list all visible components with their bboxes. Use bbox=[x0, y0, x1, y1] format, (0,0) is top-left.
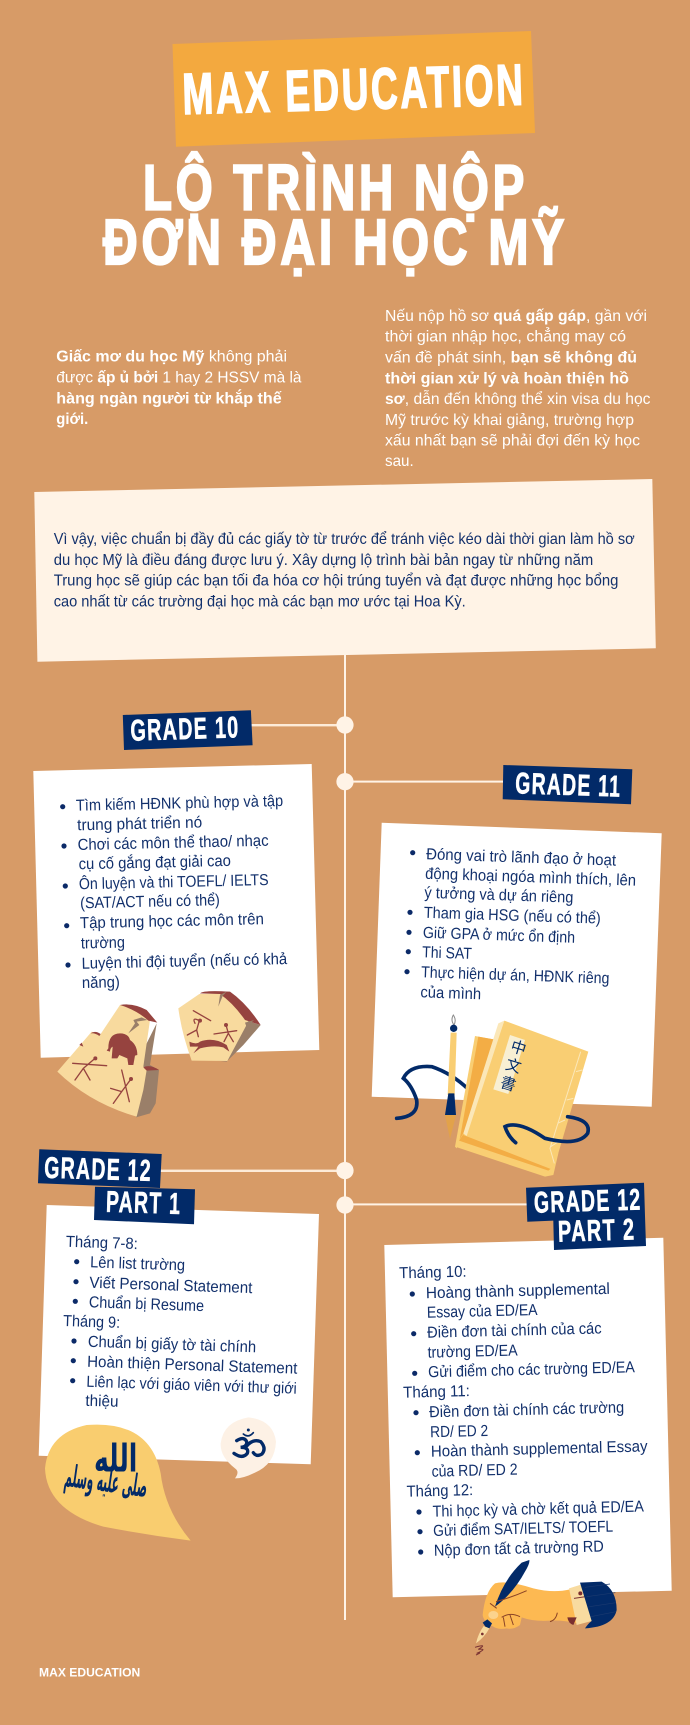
text block: intro left: hàng ngàn người từ khắp thế bbox=[56, 388, 282, 407]
list: grade 11 tasks: Giữ GPA ở mức ổn định bbox=[423, 924, 575, 947]
timeline bbox=[158, 648, 529, 1620]
list: grade 12 part 1 tasks: thiệu bbox=[85, 1393, 119, 1411]
list: grade 10 tasks: Ôn luyện và thi TOEFL/ IELTS bbox=[79, 870, 269, 893]
label: grade 12 part 2 bbox=[526, 1183, 646, 1250]
text block: intro right: xấu nhất bạn sẽ phải đợi đến kỳ học bbox=[385, 433, 640, 450]
panel: summary: du học Mỹ là điều đáng được lưu ý. Xây dựng lộ trình bài bản ngay từ những năm bbox=[54, 552, 593, 569]
footer brand: MAX EDUCATION bbox=[39, 1666, 140, 1680]
list: grade 11 tasks bbox=[404, 846, 636, 1003]
list: grade 12 part 1 tasks: Chuẩn bị giấy tờ tài chính bbox=[88, 1333, 256, 1356]
list: grade 11 tasks: động khoại ngóa mình thích, lên bbox=[425, 866, 636, 890]
list: grade 12 part 1 tasks: Viết Personal Statement bbox=[89, 1275, 253, 1297]
list: grade 11 tasks: Thi SAT bbox=[422, 944, 472, 963]
list: grade 12 part 2 tasks: Điền đơn tài chính của các bbox=[427, 1320, 602, 1342]
list: grade 10 tasks: Chơi các môn thể thao/ nhạc bbox=[77, 832, 269, 854]
text block: intro right: thời gian xử lý và hoàn thiện hồ bbox=[385, 370, 629, 387]
text block: intro right: vấn đề phát sinh, bạn sẽ không đủ bbox=[385, 350, 637, 367]
list: grade 12 part 2 tasks: Hoàng thành supplemental bbox=[426, 1281, 610, 1302]
icon: om speech bubble bbox=[221, 1417, 276, 1478]
banner: Max Education bbox=[172, 31, 535, 147]
text block: intro right: Nếu nộp hồ sơ quá gấp gáp, gần với bbox=[385, 308, 647, 325]
label: grade 12 part 1: PART 1 bbox=[105, 1186, 182, 1221]
list: grade 10 tasks: Tìm kiếm HĐNK phù hợp và tập bbox=[76, 793, 283, 815]
panel: grade 12 part 2 bbox=[384, 1238, 672, 1597]
list: grade 12 part 2 tasks: RD/ ED 2 bbox=[430, 1423, 488, 1441]
list: grade 12 part 2 tasks bbox=[399, 1264, 648, 1560]
list: grade 10 tasks: Luyện thi đội tuyển (nếu có khả bbox=[81, 950, 287, 973]
list: grade 12 part 2 tasks: của RD/ ED 2 bbox=[431, 1462, 518, 1481]
list: grade 12 part 2 tasks: Hoàn thành supplemental Essay bbox=[431, 1438, 648, 1461]
list: grade 11 tasks: Thực hiện dự án, HĐNK riêng bbox=[421, 964, 610, 988]
text block: intro right: sơ, dẫn đến không thể xin visa du học bbox=[385, 389, 650, 408]
list: grade 12 part 1 tasks: Liên lạc với giáo viên với thư giới bbox=[86, 1374, 297, 1398]
list: grade 12 part 2 tasks: trường ED/EA bbox=[427, 1342, 518, 1362]
list: grade 12 part 2 tasks: Thi học kỳ và chờ kết quả ED/EA bbox=[432, 1499, 644, 1521]
title bbox=[103, 150, 568, 278]
text block: intro right: sau. bbox=[385, 453, 414, 470]
list: grade 12 part 2 tasks: Điền đơn tài chính các trường bbox=[429, 1400, 624, 1421]
text block: intro left: giới. bbox=[56, 411, 88, 428]
list: grade 12 part 2 tasks: Tháng 12: bbox=[406, 1482, 473, 1501]
panel: summary: Trung học sẽ giúp các bạn tối đa hóa cơ hội trúng tuyển và đạt được những học bổng bbox=[54, 572, 618, 590]
text block: intro left bbox=[56, 349, 302, 428]
list: grade 10 tasks: Tập trung học các môn trên bbox=[80, 911, 264, 932]
panel: grade 10 bbox=[33, 764, 319, 1058]
list: grade 10 tasks: năng) bbox=[82, 974, 120, 992]
list: grade 12 part 2 tasks: Essay của ED/EA bbox=[427, 1302, 538, 1322]
list: grade 12 part 1 tasks bbox=[63, 1234, 298, 1411]
label: grade 12 part 1: GRADE 12 bbox=[44, 1152, 152, 1188]
panel: summary: Vì vậy, việc chuẩn bị đầy đủ các giấy tờ từ trước để tránh việc kéo dài thời gian làm hồ sơ bbox=[54, 530, 635, 548]
title: LỘ TRÌNH NỘP bbox=[143, 150, 528, 223]
label: grade 10: GRADE 10 bbox=[130, 711, 240, 748]
icon: book and calligraphy brush: 文 bbox=[503, 1052, 524, 1078]
list: grade 12 part 1 tasks: Tháng 9: bbox=[63, 1313, 120, 1332]
icon: yellow speech bubble with calligraphy bbox=[45, 1425, 191, 1541]
list: grade 12 part 1 tasks: Hoàn thiện Personal Statement bbox=[87, 1354, 298, 1378]
panel: grade 11 bbox=[372, 823, 662, 1107]
icon: yellow speech bubble with calligraphy: الله bbox=[94, 1437, 137, 1482]
label: grade 11: GRADE 11 bbox=[515, 767, 622, 804]
icon: book and calligraphy brush: 書 bbox=[498, 1070, 519, 1096]
text block: intro left: Giấc mơ du học Mỹ không phải bbox=[56, 349, 287, 366]
panel: summary: cao nhất từ các trường đại học mà các bạn mơ ước tại Hoa Kỳ. bbox=[54, 593, 466, 610]
list: grade 12 part 2 tasks: Gửi điểm cho các trường ED/EA bbox=[428, 1358, 635, 1381]
list: grade 12 part 1 tasks: Chuẩn bị Resume bbox=[89, 1293, 204, 1315]
label: grade 12 part 1 bbox=[38, 1149, 195, 1224]
icon: cave painting rocks bbox=[57, 991, 261, 1117]
text block: intro left: được ấp ủ bởi 1 hay 2 HSSV mà là bbox=[56, 370, 302, 386]
list: grade 12 part 1 tasks: Tháng 7-8: bbox=[66, 1234, 138, 1253]
list: grade 10 tasks bbox=[60, 793, 287, 992]
icon: hand writing with quill bbox=[475, 1560, 617, 1655]
list: grade 12 part 2 tasks: Tháng 10: bbox=[399, 1264, 467, 1282]
list: grade 10 tasks: cụ cố gắng đạt giải cao bbox=[78, 851, 231, 873]
panel: summary bbox=[34, 479, 656, 662]
list: grade 10 tasks: trường bbox=[81, 935, 125, 952]
list: grade 11 tasks: ý tưởng và dự án riêng bbox=[424, 885, 574, 907]
list: grade 10 tasks: (SAT/ACT nếu có thể) bbox=[80, 891, 220, 912]
label: grade 12 part 2: PART 2 bbox=[558, 1213, 636, 1249]
icon: book and calligraphy brush: 中 bbox=[508, 1034, 529, 1060]
icon: book and calligraphy brush bbox=[397, 1015, 588, 1177]
text block: intro right bbox=[385, 308, 650, 470]
panel: grade 12 part 1 bbox=[39, 1205, 319, 1464]
list: grade 10 tasks: trung phát triển nó bbox=[77, 813, 202, 834]
list: grade 12 part 2 tasks: Tháng 11: bbox=[403, 1383, 470, 1402]
list: grade 12 part 2 tasks: Gửi điểm SAT/IELTS/ TOEFL bbox=[433, 1518, 613, 1540]
list: grade 12 part 2 tasks: Nộp đơn tất cả trường RD bbox=[434, 1539, 604, 1560]
list: grade 11 tasks: Tham gia HSG (nếu có thể) bbox=[424, 904, 601, 928]
label: grade 10 bbox=[123, 710, 253, 750]
list: grade 11 tasks: của mình bbox=[420, 984, 481, 1003]
label: grade 11 bbox=[503, 765, 632, 804]
icon: yellow speech bubble with calligraphy: صلى عليه وسلم bbox=[62, 1459, 150, 1505]
list: grade 12 part 1 tasks: Lên list trường bbox=[90, 1254, 185, 1274]
text block: intro right: Mỹ trước kỳ khai giảng, trường hợp bbox=[385, 412, 634, 429]
list: grade 11 tasks: Đóng vai trò lãnh đạo ở hoạt bbox=[426, 846, 617, 870]
text block: intro right: thời gian nhập học, chẳng may có bbox=[385, 327, 626, 346]
